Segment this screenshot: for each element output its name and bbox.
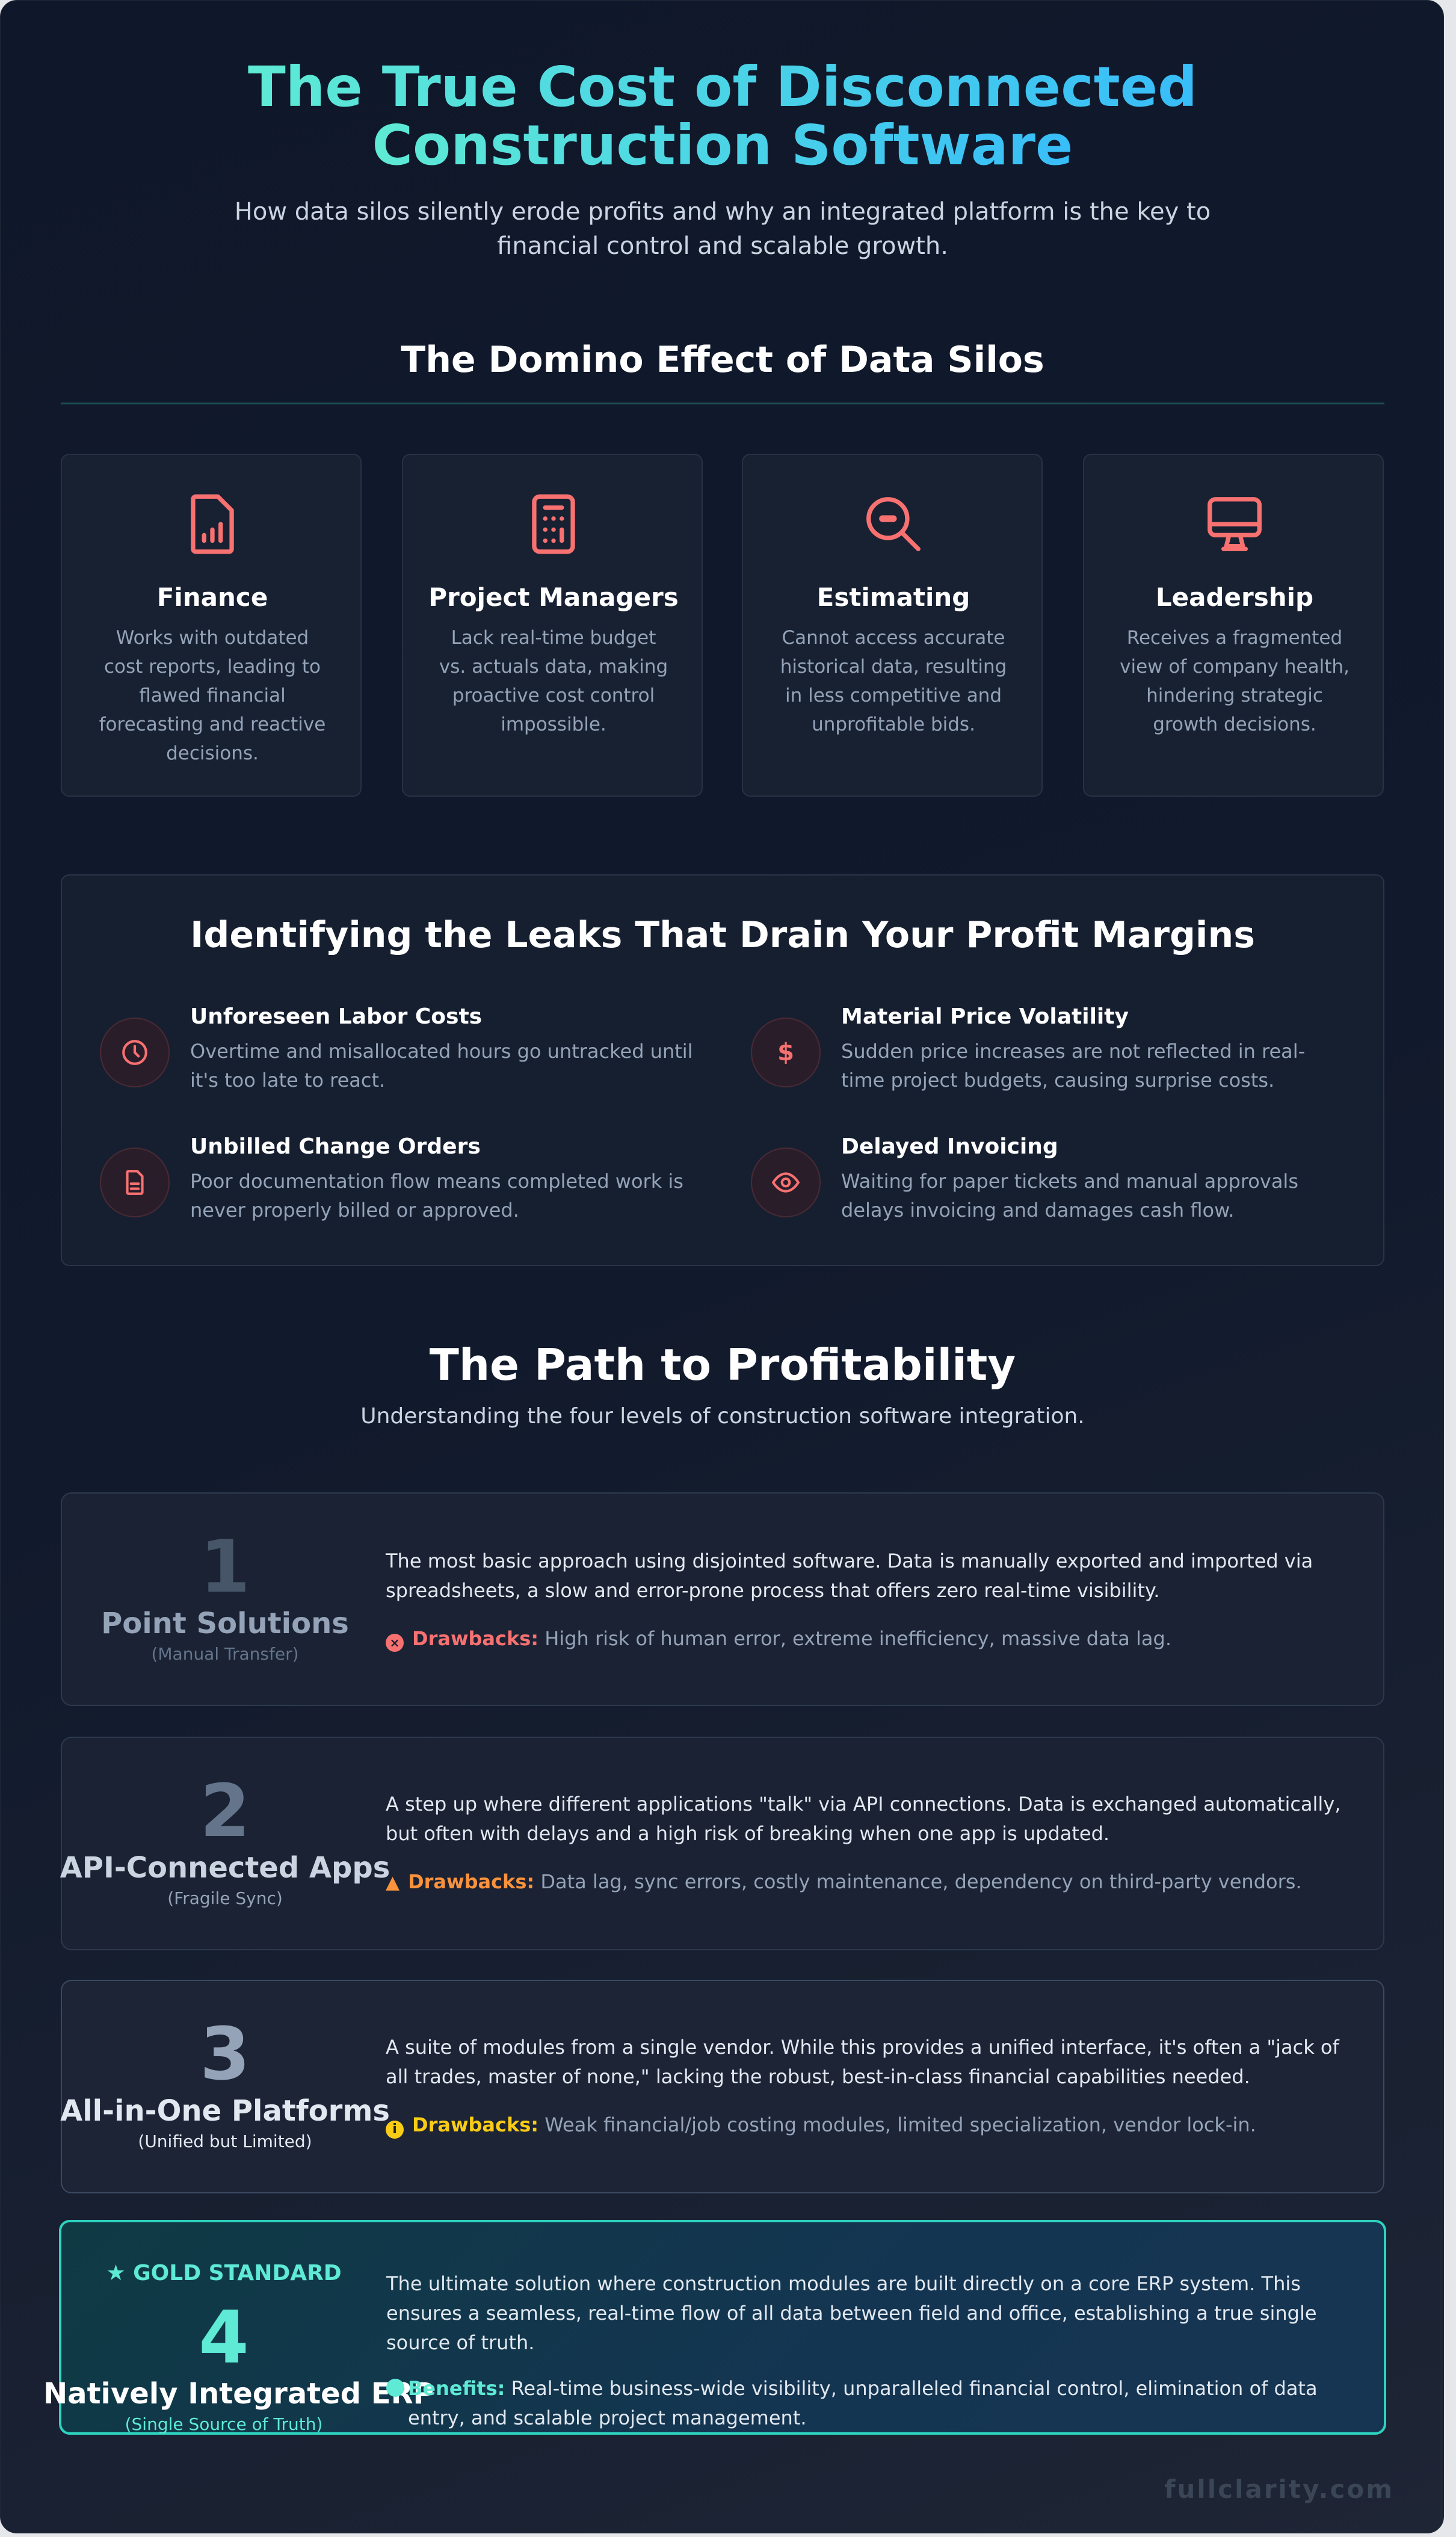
panel: level 3: A suite of modules from a single vendor. While this provides a unified interface, it's often a "jack of [386,2036,1339,2059]
text: decisions. [166,743,259,764]
panel: level 3: 3 [200,2013,250,2097]
text: unprofitable bids. [812,714,975,735]
badge: ★ GOLD STANDARD [106,2261,342,2285]
item: labor [100,1004,693,1092]
text: Works with outdated [116,627,309,649]
item: change orders [100,1134,683,1222]
panel: estimating [742,454,1043,797]
callout: benefits: entry, and scalable project management. [408,2406,807,2429]
panel: level 4 gold standard: (Single Source of Truth) [125,2414,322,2434]
icon: chart file [191,495,234,554]
panel: level 2: but often with delays and a high risk of breaking when one app is updated. [386,1822,1109,1845]
panel: leaks [61,874,1384,1266]
icon: clock [100,1018,170,1087]
text [439,627,668,735]
item: labor: Unforeseen Labor Costs [190,1004,482,1029]
heading: path to profitability: The Path to Profitability [430,1340,1016,1390]
panel: level 4 gold standard [59,2220,1386,2435]
panel: level 3: All-in-One Platforms [60,2094,390,2128]
text [1120,627,1350,735]
icon: search [866,497,921,551]
icon: monitor [1208,497,1262,551]
panel: level 4 gold standard: ensures a seamless, real-time flow of all data between field and office, establishing a true single [386,2302,1317,2325]
text: proactive cost control [452,685,655,706]
icon: eye [751,1148,821,1217]
item: labor: it's too late to react. [190,1069,385,1092]
panel: level 1: Point Solutions [101,1607,349,1640]
panel: level 2 [61,1737,1384,1950]
subtitle: financial control and scalable growth. [497,232,948,260]
item: labor: Overtime and misallocated hours go untracked until [190,1040,693,1063]
item: invoicing: Delayed Invoicing [841,1134,1058,1159]
panel: level 1: 1 [200,1525,250,1609]
icon: price [751,1018,821,1087]
panel: level 1 [61,1492,1384,1706]
heading: Identifying the Leaks That Drain Your Profit Margins [190,914,1255,956]
heading: Leadership [1156,582,1313,612]
subheading: Understanding the four levels of construction software integration. [360,1404,1085,1429]
item: change orders: Poor documentation flow means completed work is [190,1170,683,1193]
text: in less competitive and [785,685,1002,706]
panel: level 3: (Unified but Limited) [138,2131,312,2151]
icon: calculator [532,495,575,554]
panel: level 4 gold standard: Natively Integrated ERP [43,2377,434,2411]
callout: drawbacks: i [392,2122,397,2137]
text: flawed financial [139,685,286,706]
text: historical data, resulting [780,656,1007,678]
panel: project managers [402,454,703,797]
callout: drawbacks: Drawbacks: Weak financial/job costing modules, limited specialization, vendor lock-in. [412,2113,1256,2136]
item: invoicing: Waiting for paper tickets and manual approvals [841,1170,1298,1193]
item: material [751,1004,1305,1092]
subtitle [235,198,1211,260]
item: change orders: never properly billed or approved. [190,1199,519,1222]
text [99,627,325,764]
panel: level 4 gold standard: The ultimate solution where construction modules are built directly on a core ERP system. This [386,2272,1301,2295]
panel: leadership [1083,454,1384,797]
callout: drawbacks: × [390,1636,399,1650]
callout: drawbacks: ▲ Drawbacks: Data lag, sync errors, costly maintenance, dependency on third-party vendors. [386,1870,1302,1893]
panel: level 2: 2 [200,1770,250,1853]
panel: level 1: The most basic approach using disjointed software. Data is manually exported and imported via [386,1550,1313,1572]
panel: level 2: (Fragile Sync) [167,1888,283,1908]
watermark: fullclarity.com [1164,2474,1394,2504]
text [780,627,1007,735]
text: forecasting and reactive [99,714,325,735]
panel: level 3 [61,1980,1384,2193]
text: hindering strategic [1146,685,1323,706]
panel: level 1: spreadsheets, a slow and error-prone process that offers zero real-time visibility. [386,1579,1159,1602]
item: invoicing [751,1134,1298,1222]
text: growth decisions. [1153,714,1316,735]
item: change orders: Unbilled Change Orders [190,1134,481,1159]
title: Construction Software [372,113,1073,178]
callout: benefits [386,2377,1318,2429]
heading: Project Managers [428,582,679,612]
heading: Estimating [817,582,970,612]
heading: Finance [157,582,268,612]
text: impossible. [501,714,606,735]
panel: level 2: A step up where different applications "talk" via API connections. Data is exchanged automatically, [386,1793,1340,1815]
title: The True Cost of Disconnected [248,55,1197,119]
text: view of company health, [1120,656,1350,678]
callout: drawbacks: Drawbacks: High risk of human error, extreme inefficiency, massive data lag. [412,1627,1171,1650]
subtitle: How data silos silently erode profits and why an integrated platform is the key to [235,198,1211,226]
panel: level 3: all trades, master of none," lacking the robust, best-in-class financial capabilities needed. [386,2065,1250,2088]
heading: domino effect: The Domino Effect of Data Silos [401,339,1044,381]
text: vs. actuals data, making [439,656,668,678]
text: Lack real-time budget [451,627,656,649]
panel: finance [61,454,362,797]
text: Receives a fragmented [1127,627,1342,649]
icon: document [100,1148,170,1217]
panel: level 4 gold standard: 4 [199,2296,249,2380]
panel: level 4 gold standard: source of truth. [386,2331,534,2354]
item: invoicing: delays invoicing and damages cash flow. [841,1199,1235,1222]
text: cost reports, leading to [104,656,321,678]
panel: level 1: (Manual Transfer) [151,1644,299,1664]
panel: level 2: API-Connected Apps [60,1851,390,1885]
callout: benefits: Benefits: Real-time business-wide visibility, unparalleled financial control, elimination of data [408,2377,1318,2400]
item: material: time project budgets, causing surprise costs. [841,1069,1274,1092]
icon: price: $ [777,1039,794,1066]
text: Cannot access accurate [782,627,1005,649]
title [248,55,1197,178]
item: material: Sudden price increases are not reflected in real- [841,1040,1305,1063]
item: material: Material Price Volatility [841,1004,1129,1029]
